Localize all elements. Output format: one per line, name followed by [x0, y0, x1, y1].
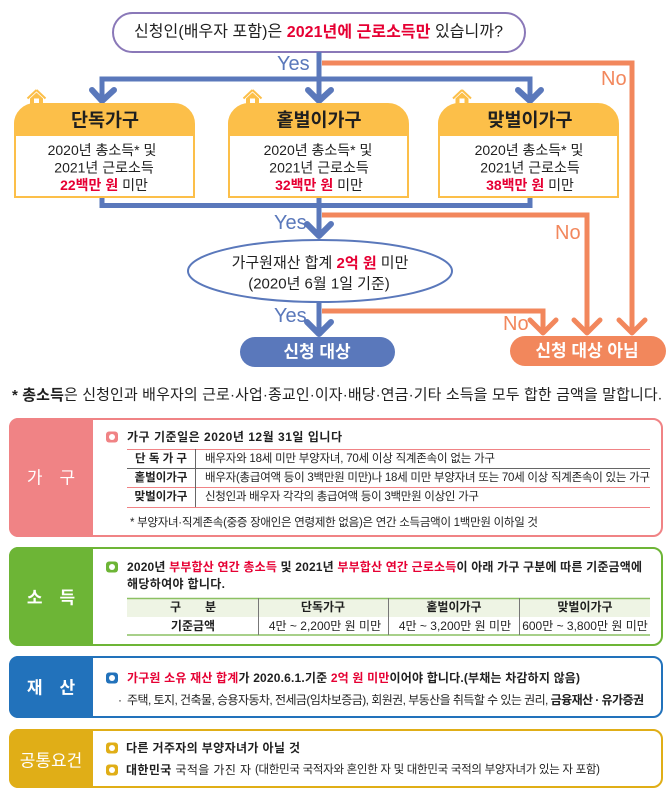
panel: income: 4만 ~ 2,200만 원 미만: [269, 619, 381, 633]
question pill: [113, 13, 525, 52]
property ellipse: [188, 240, 452, 302]
property ellipse: (2020년 6월 1일 기준): [248, 276, 390, 292]
panel: income: 홑벌이가구: [426, 599, 482, 614]
panel: income: 2020년 부부합산 연간 총소득 및 2021년 부부합산 연간 근로소득이 아래 가구 구분에 따른 기준금액에: [127, 559, 642, 574]
panel: income: 구 분: [170, 600, 216, 614]
orange No line from property: [322, 311, 556, 333]
panel: household: 홑벌이가구: [135, 470, 188, 484]
panel: household: 단 독 가 구: [135, 451, 187, 465]
icon: house 2: [244, 90, 262, 104]
button: eligible: 신청 대상: [283, 342, 351, 362]
panel: household: [9, 418, 662, 537]
panel: common requirements: 다른 거주자의 부양자녀가 아닐 것: [126, 740, 300, 755]
panel: property: ·: [118, 693, 122, 707]
panel: household: 신청인과 배우자 각각의 총급여액 등이 3백만원 이상인 가구: [205, 489, 479, 503]
card: single-income household: 32백만 원 미만: [275, 177, 363, 193]
card: single household: 22백만 원 미만: [60, 177, 148, 193]
card: dual-income household: 2021년 근로소득: [480, 160, 580, 176]
orange No line from income: [322, 215, 600, 333]
panel: property: 가구원 소유 재산 합계가 2020.6.1.기준 2억 원 미만이어야 합니다.(부채는 차감하지 않음): [127, 670, 580, 685]
panel: income: [9, 547, 662, 646]
blue Yes arrow from income: [102, 198, 530, 236]
card: single household: 2020년 총소득* 및: [48, 142, 156, 158]
card: single-income household: 2021년 근로소득: [269, 160, 369, 176]
card: single household: 2021년 근로소득: [54, 160, 154, 176]
panel: household: 맞벌이가구: [135, 489, 188, 503]
blue Yes arrows to household types: [92, 52, 541, 101]
panel: income: 소 득: [27, 588, 75, 608]
card: dual-income household: [438, 104, 618, 197]
button: not eligible: 신청 대상 아님: [535, 342, 639, 360]
panel: household: 가 구: [27, 468, 75, 488]
label: No: No: [503, 313, 529, 335]
panel: income: 해당하여야 합니다.: [127, 576, 225, 591]
panel: common requirements: 대한민국 국적을 가진 자: [126, 762, 251, 777]
orange No line from question: [322, 63, 645, 333]
card: dual-income household: 2020년 총소득* 및: [475, 142, 583, 158]
panel: income: 4만 ~ 3,200만 원 미만: [399, 619, 511, 633]
card: single household: [14, 104, 194, 197]
button: not eligible: [510, 336, 666, 366]
panel: household: 배우자와 18세 미만 부양자녀, 70세 이상 직계존속이 없는 가구: [205, 452, 495, 465]
label: No: No: [601, 68, 627, 90]
panel: income: 기준금액: [171, 618, 215, 633]
footnote: total income: * 총소득은 신청인과 배우자의 근로·사업·종교인·이자·배당·연금·기타 소득을 모두 합한 금액을 말합니다.: [12, 386, 662, 404]
question pill: 신청인(배우자 포함)은 2021년에 근로소득만 있습니까?: [134, 22, 503, 40]
panel: household: 배우자(총급여액 등이 3백만원 미만)나 18세 미만 부양자녀 또는 70세 이상 직계존속이 있는 가구: [205, 470, 650, 484]
blue Yes arrow from property: [307, 302, 331, 334]
label: No: No: [555, 222, 581, 244]
icon: house 1: [28, 90, 46, 104]
card: single household: 단독가구: [71, 110, 139, 130]
panel: common requirements: 공통요건: [20, 752, 82, 770]
panel: household: 가구 기준일은 2020년 12월 31일 입니다: [127, 429, 342, 444]
panel: common requirements: (대한민국 국적자와 혼인한 자 및 대한민국 국적의 부양자녀가 있는 자 포함): [255, 763, 600, 776]
panel: property: 재 산: [27, 678, 75, 698]
icon: house 3: [453, 90, 471, 104]
card: dual-income household: 맞벌이가구: [487, 110, 573, 130]
panel: income: 600만 ~ 3,800만 원 미만: [522, 619, 648, 633]
card: single-income household: 2020년 총소득* 및: [264, 142, 372, 158]
card: dual-income household: 38백만 원 미만: [486, 177, 574, 193]
property ellipse: 가구원재산 합계 2억 원 미만: [232, 254, 409, 272]
panel: income: 단독가구: [301, 599, 345, 614]
button: eligible: [240, 337, 395, 367]
panel: common requirements: [9, 729, 662, 788]
panel: property: [9, 656, 662, 718]
panel: property: 주택, 토지, 건축물, 승용자동차, 전세금(임차보증금), 회원권, 부동산을 취득할 수 있는 권리, 금융재산 · 유가증권: [127, 692, 644, 707]
panel: income: 맞벌이가구: [557, 599, 613, 614]
card: single-income household: [228, 104, 408, 197]
card: single-income household: 홑벌이가구: [276, 110, 362, 130]
label: Yes: Yes: [277, 53, 310, 75]
label: Yes: Yes: [274, 305, 307, 327]
panel: household: * 부양자녀·직계존속(중증 장애인은 연령제한 없음)은 연간 소득금액이 1백만원 이하일 것: [130, 515, 538, 529]
label: Yes: Yes: [274, 212, 307, 234]
